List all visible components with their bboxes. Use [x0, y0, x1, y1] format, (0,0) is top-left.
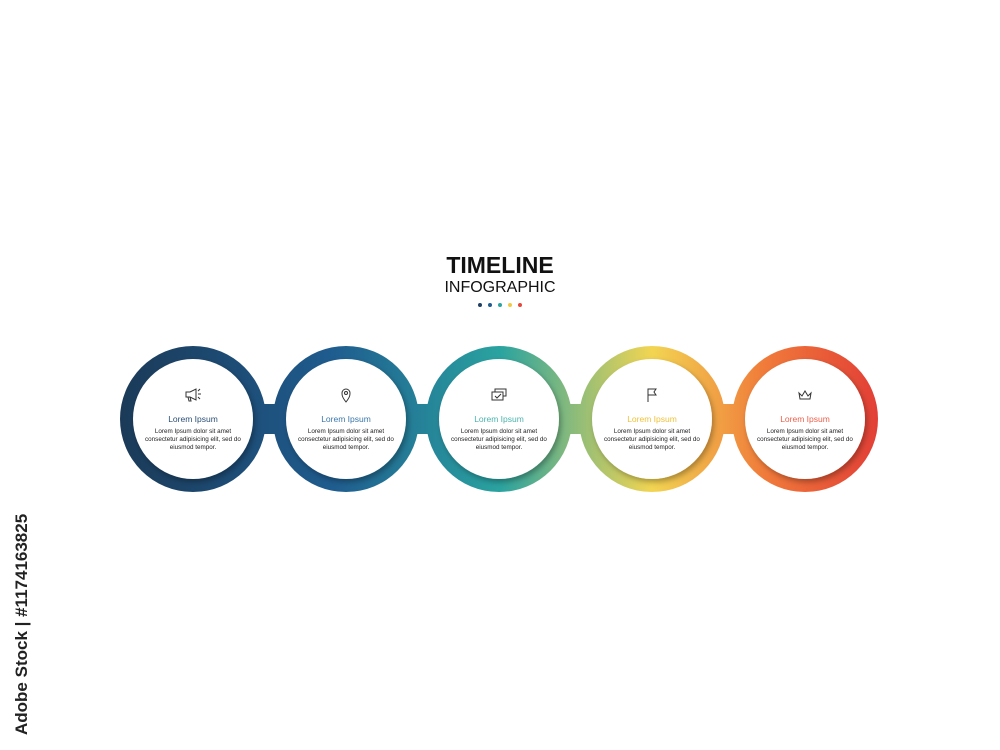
step 4: Lorem Ipsum [627, 414, 677, 424]
icon: flag [648, 388, 657, 402]
step 5: Lorem Ipsum dolor sit amet consectetur adipisicing elit, sed do eiusmod tempor. [757, 428, 853, 451]
step 2 [298, 388, 394, 451]
title [444, 252, 556, 296]
icon: location pin [342, 388, 350, 403]
step 5 [757, 390, 853, 451]
step 4 [604, 388, 700, 451]
step 3: Lorem Ipsum dolor sit amet consectetur adipisicing elit, sed do eiusmod tempor. [451, 428, 547, 451]
step 2: Lorem Ipsum [321, 414, 371, 424]
title: INFOGRAPHIC [444, 279, 556, 296]
step 5: Lorem Ipsum [780, 414, 830, 424]
icon: megaphone [186, 388, 201, 402]
icon: chat [492, 388, 506, 400]
step 2: Lorem Ipsum dolor sit amet consectetur adipisicing elit, sed do eiusmod tempor. [298, 428, 394, 451]
side caption: Adobe Stock | #1174163825 [12, 514, 31, 735]
step 3 [451, 388, 547, 451]
step 1: Lorem Ipsum [168, 414, 218, 424]
color dots [478, 303, 522, 307]
title: TIMELINE [446, 252, 554, 278]
step 1 [145, 388, 241, 451]
step 1: Lorem Ipsum dolor sit amet consectetur adipisicing elit, sed do eiusmod tempor. [145, 428, 241, 451]
icon: crown [798, 390, 812, 400]
step 4: Lorem Ipsum dolor sit amet consectetur adipisicing elit, sed do eiusmod tempor. [604, 428, 700, 451]
step 3: Lorem Ipsum [474, 414, 524, 424]
